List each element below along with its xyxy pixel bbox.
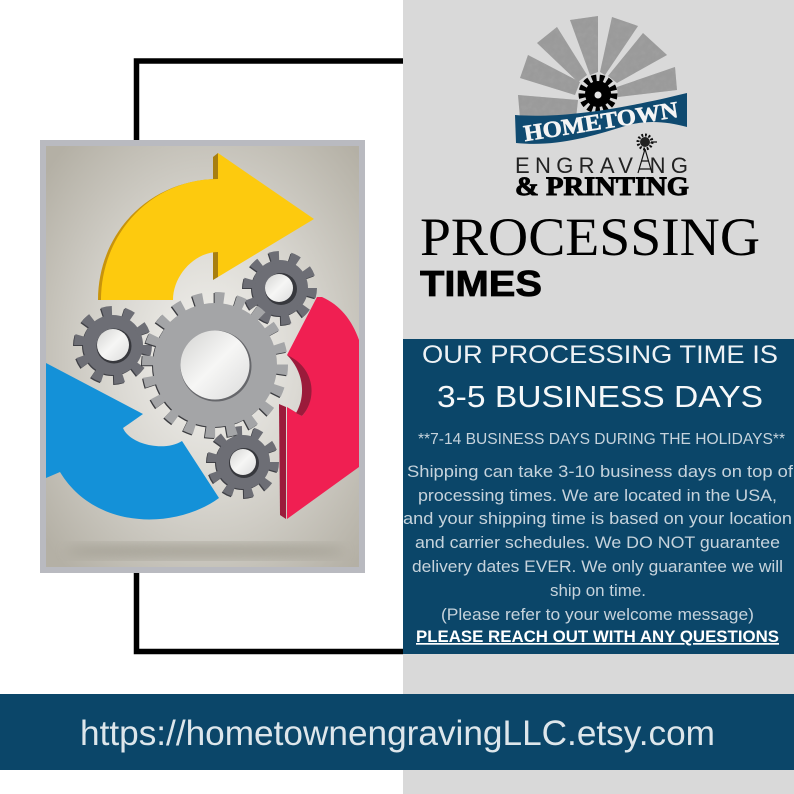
illustration: arrows and gears [40, 140, 365, 573]
shop URL: https://hometownengravingLLC.etsy.com [80, 714, 715, 753]
printing text: & PRINTING [515, 172, 689, 201]
holiday note: **7-14 BUSINESS DAYS DURING THE HOLIDAYS** [418, 431, 785, 448]
shipping text block: Shipping can take 3-10 business days on top of [407, 462, 793, 481]
logo: Hometown Engraving & Printing [515, 16, 689, 201]
call to action: PLEASE REACH OUT WITH ANY QUESTIONS [416, 627, 779, 646]
heading: business days: 3-5 BUSINESS DAYS [437, 379, 763, 414]
icon: windmill blades [518, 16, 677, 118]
icon: windmill hub [582, 78, 614, 110]
banner [515, 93, 687, 144]
shipping text block: (Please refer to your welcome message) [441, 605, 754, 624]
black frame [136, 61, 403, 652]
icon: small gear top right [248, 257, 311, 320]
icon: small gear left [79, 312, 146, 379]
heading: processing time: OUR PROCESSING TIME IS [422, 341, 778, 369]
panel: processing time [403, 339, 794, 654]
icon: red arrow [279, 297, 359, 519]
title: Times: TIMES [420, 263, 542, 304]
icon: blue arrow [46, 363, 219, 519]
icon: small windmill [638, 135, 657, 173]
shipping text block: and your shipping time is based on your location [403, 509, 792, 528]
shipping text block: delivery dates EVER. We only guarantee we will [412, 557, 783, 576]
grey right panel [403, 0, 794, 794]
icon: large centre gear [147, 298, 282, 433]
icon: small gear bottom [212, 432, 273, 493]
shipping text block: ship on time. [550, 581, 646, 600]
shipping text block [403, 462, 793, 624]
shipping text block: and carrier schedules. We DO NOT guarantee [415, 533, 780, 552]
icon: yellow arrow [98, 153, 314, 300]
shipping text block: processing times. We are located in the USA, [418, 486, 777, 505]
engraving text: ENGRAV NG [515, 153, 688, 178]
footer band with shop URL [0, 694, 794, 770]
title: Processing: PROCESSING [420, 207, 760, 267]
banner text: HOMETOWN [522, 97, 680, 146]
